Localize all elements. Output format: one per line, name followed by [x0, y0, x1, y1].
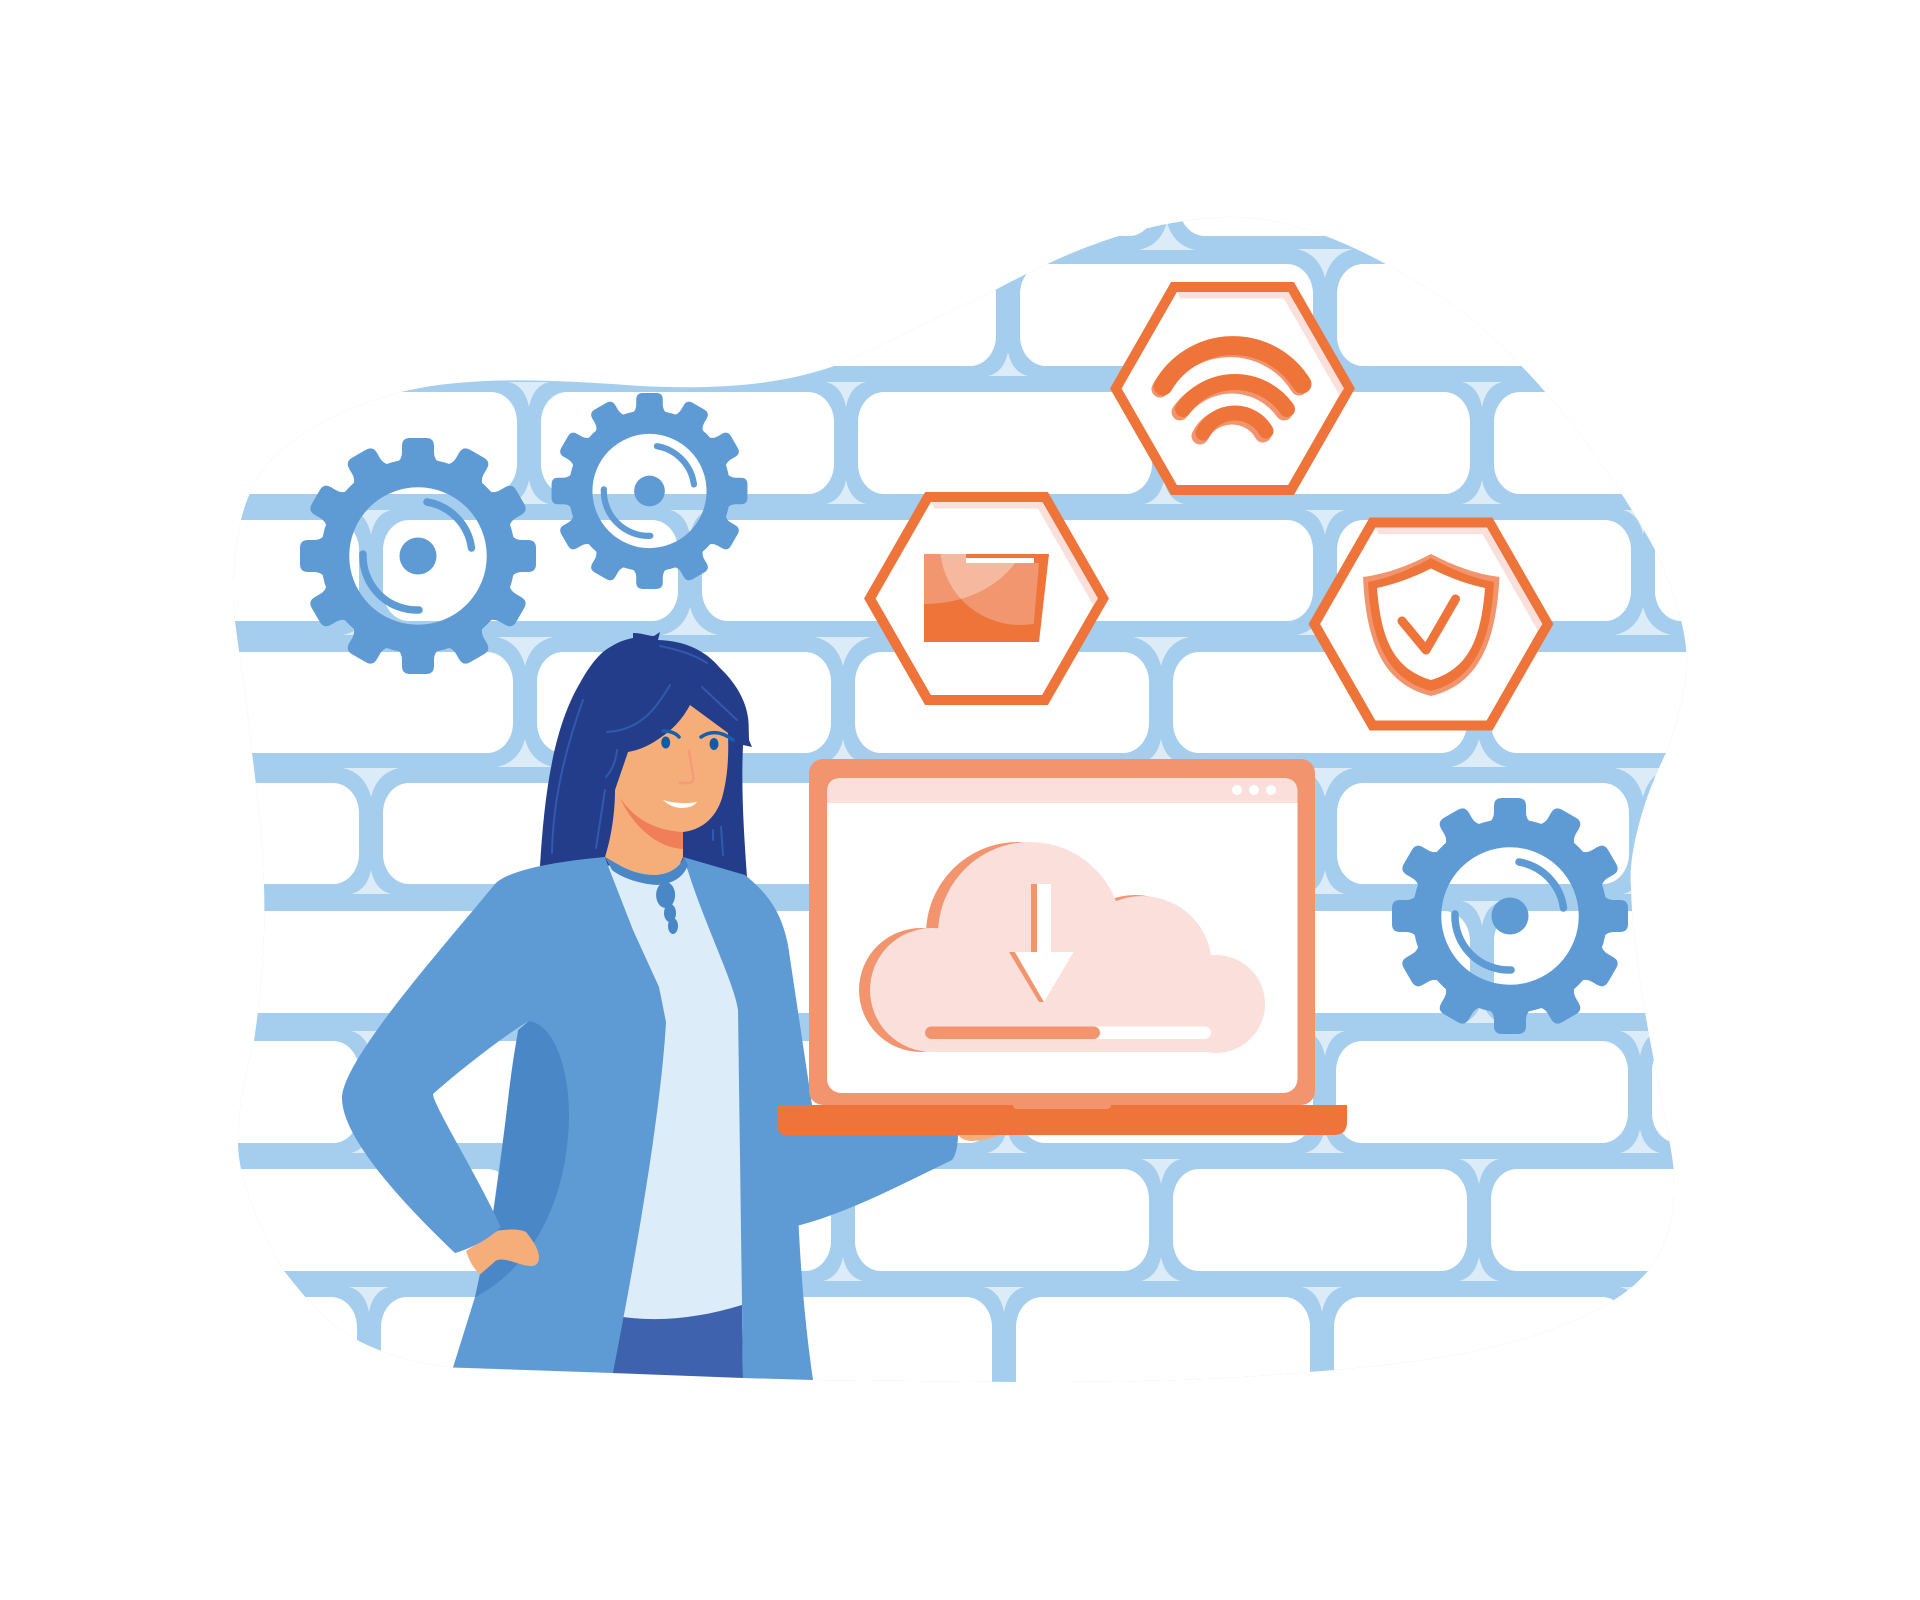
hair highlights	[552, 646, 737, 855]
hand under laptop	[958, 1135, 1000, 1141]
jacket right panel	[683, 857, 958, 1380]
illustration	[233, 216, 1687, 1382]
neck and face	[605, 705, 728, 875]
jacket lining	[475, 1021, 569, 1298]
laptop	[777, 759, 1347, 1135]
icon: gear right	[1392, 798, 1628, 1034]
window dots	[1232, 785, 1276, 795]
progress bar	[925, 1026, 1211, 1039]
smile	[663, 800, 697, 808]
icon: shield hexagon	[1314, 522, 1548, 726]
cloud	[870, 842, 1265, 1053]
shirt	[595, 862, 750, 1319]
eyes and brows	[661, 731, 733, 750]
laptop screen frame	[809, 759, 1315, 1105]
collar	[605, 857, 688, 885]
hand on hip	[466, 1230, 539, 1274]
nose	[680, 751, 693, 783]
laptop base	[777, 1105, 1347, 1135]
brick wall background	[233, 216, 1687, 1382]
icon: folder hexagon	[864, 492, 1109, 705]
download arrow	[1009, 884, 1074, 1002]
window title bar	[827, 778, 1298, 803]
icon: wifi hexagon	[1116, 287, 1349, 490]
icon: large gear left	[300, 438, 536, 674]
icon: small gear	[552, 393, 747, 589]
jacket left body	[453, 857, 666, 1373]
jacket sleeve	[342, 857, 605, 1253]
hair	[540, 632, 752, 900]
laptop notch	[1013, 1105, 1111, 1109]
person	[342, 632, 958, 1380]
screen	[827, 778, 1298, 1093]
trousers	[612, 1305, 743, 1378]
cloud shadow	[859, 842, 1205, 1052]
necklace	[656, 882, 678, 934]
neck shadow	[620, 798, 683, 849]
